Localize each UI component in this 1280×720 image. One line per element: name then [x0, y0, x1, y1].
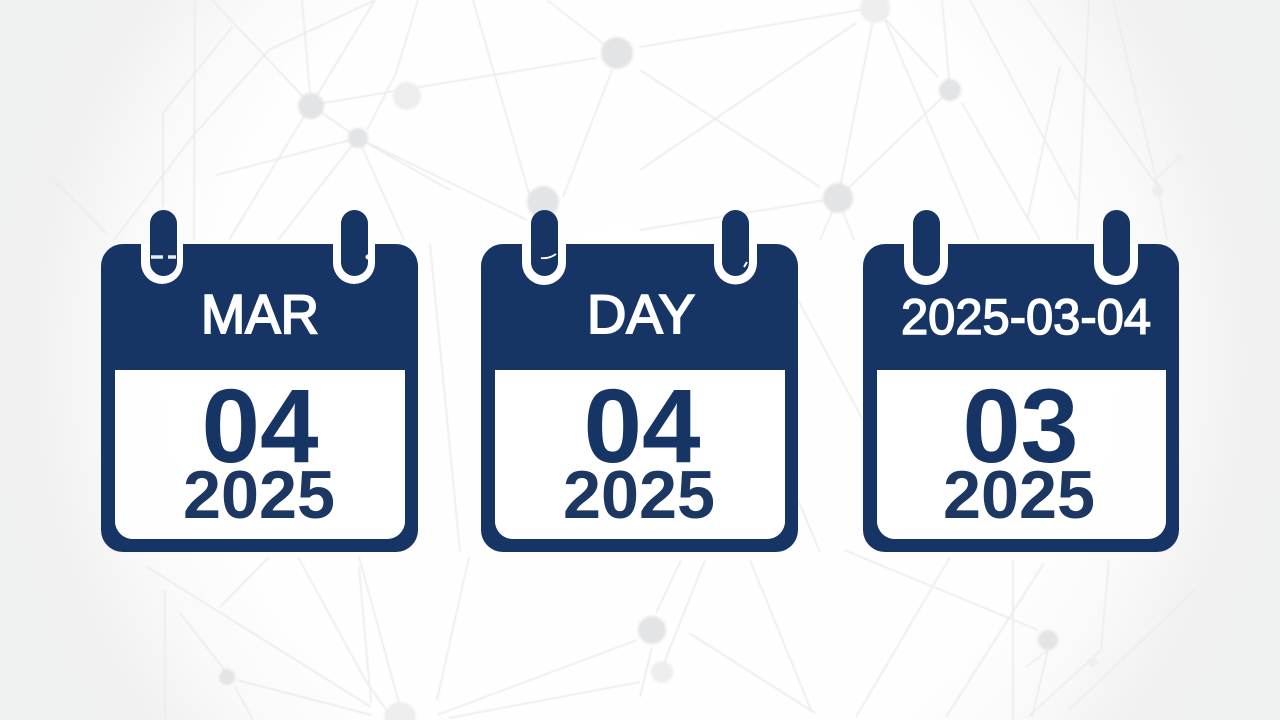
month number: 03 — [962, 368, 1078, 485]
binding rings — [141, 210, 375, 284]
month header: MAR — [201, 283, 319, 345]
binding rings — [522, 210, 757, 285]
calendar: MAR 04 2025 — [101, 210, 418, 552]
page surface — [495, 370, 785, 539]
page surface — [115, 370, 405, 539]
calendar: DAY 04 2025 — [481, 210, 798, 552]
calendar body — [481, 244, 798, 552]
calendar body — [863, 244, 1179, 552]
date header: 2025-03-04 — [901, 289, 1151, 345]
day number: 04 — [584, 368, 700, 485]
day number: 04 — [202, 368, 318, 485]
year: 2025 — [943, 457, 1095, 533]
year: 2025 — [563, 457, 715, 533]
page surface — [877, 370, 1166, 539]
calendar body — [101, 244, 418, 552]
calendar: 2025-03-04 03 2025 — [863, 210, 1179, 552]
year: 2025 — [183, 457, 335, 533]
label header: DAY — [587, 283, 695, 345]
binding rings — [904, 210, 1138, 285]
